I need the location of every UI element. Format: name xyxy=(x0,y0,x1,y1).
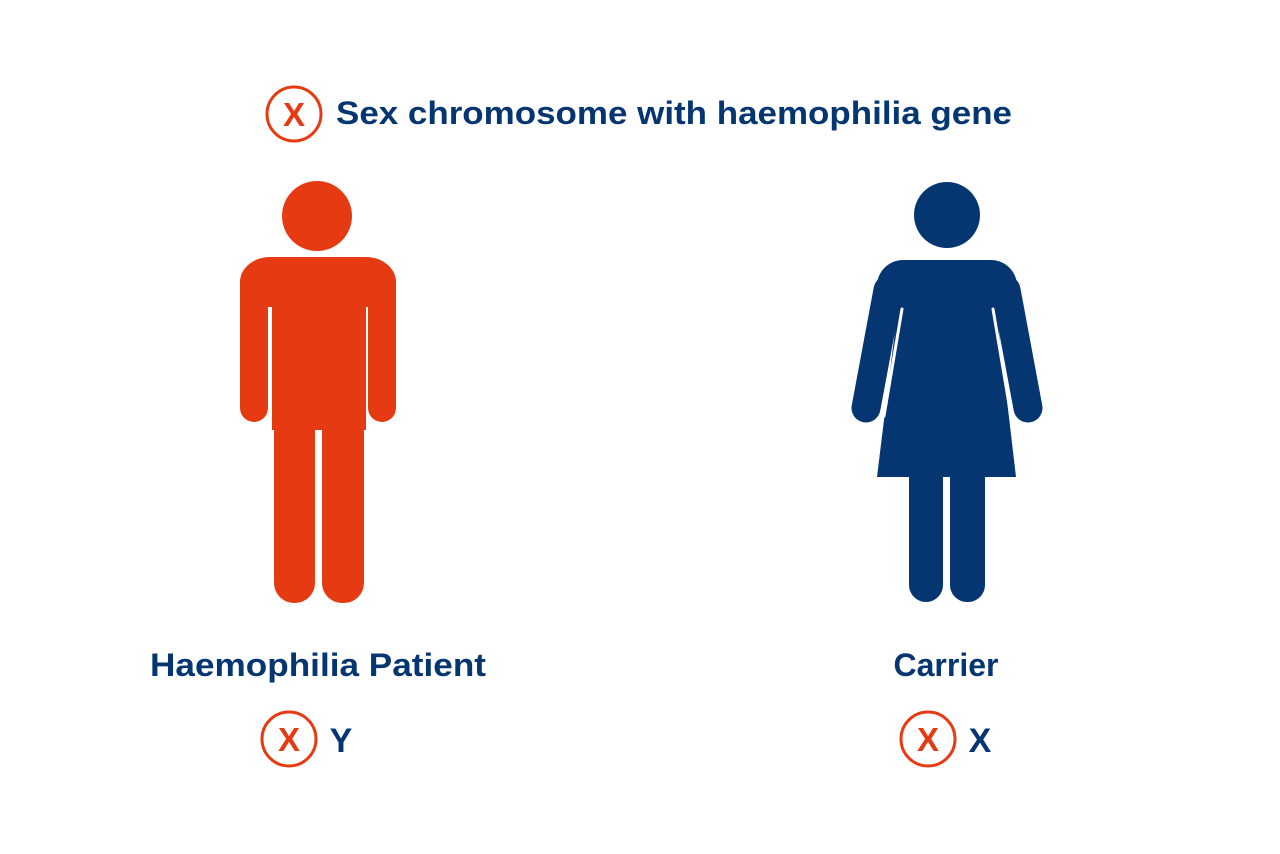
icon: circled X legend: X xyxy=(283,96,305,133)
label: Haemophilia Patient: Haemophilia Patient xyxy=(150,647,486,683)
chromosomes: patient XY xyxy=(262,712,353,766)
chromosomes: patient XY: X xyxy=(278,721,300,758)
chromosomes: patient XY: Y xyxy=(330,722,353,760)
figure: male haemophilia patient xyxy=(240,181,396,603)
figure: female carrier xyxy=(866,182,1028,602)
chromosomes: carrier XX: X xyxy=(969,722,992,760)
label: Carrier: Carrier xyxy=(894,647,998,683)
icon: circled X legend xyxy=(267,87,321,141)
chromosomes: carrier XX xyxy=(901,712,992,766)
chromosomes: carrier XX: X xyxy=(917,721,939,758)
legend xyxy=(267,87,1012,141)
legend text: Sex chromosome with haemophilia gene xyxy=(336,95,1012,131)
